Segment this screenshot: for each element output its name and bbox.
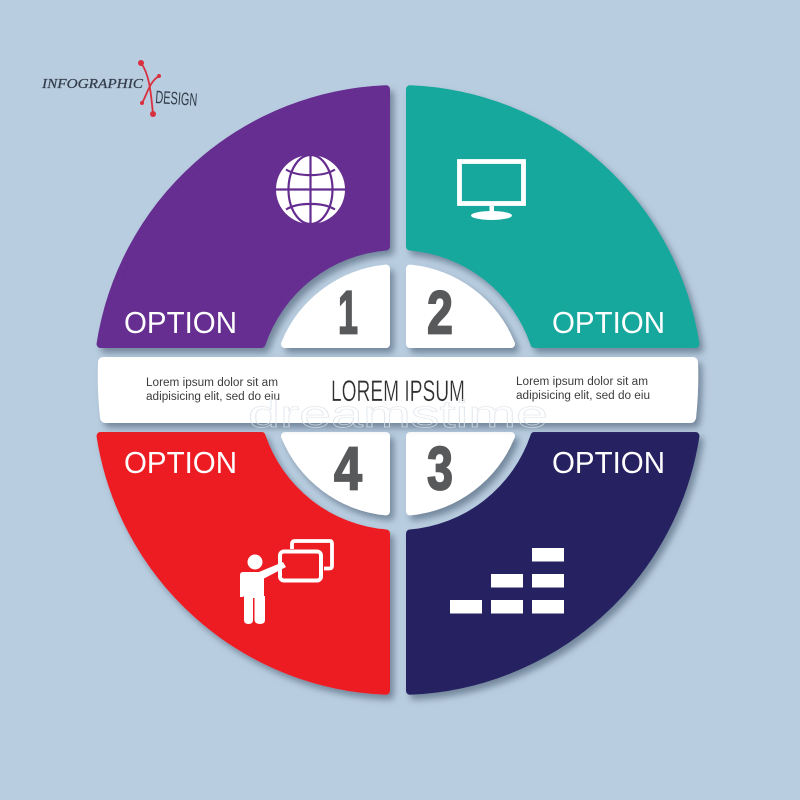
icon: monitor: [460, 162, 524, 220]
panel: number 3 segment: 3: [427, 434, 453, 502]
panel: number 4 segment: [285, 434, 386, 511]
text block: left description: Lorem ipsum dolor sit am: [146, 377, 278, 389]
logo: Infographic Design: INFOGRAPHIC: [41, 77, 144, 92]
heading: Lorem Ipsum: LOREM IPSUM: [331, 375, 465, 408]
icon: stepped bars: [450, 548, 564, 614]
panel: number 4 segment: 4: [334, 434, 362, 502]
panel 1: purple quadrant: [101, 89, 386, 344]
panel 3: navy quadrant: [410, 436, 695, 691]
panel: number 1 segment: [285, 269, 386, 346]
panel 3: navy quadrant: OPTION: [552, 446, 665, 480]
logo: Infographic Design: DESIGN: [155, 87, 198, 110]
panel: number 2 segment: [410, 269, 511, 346]
icon: globe: [276, 155, 345, 224]
logo: Infographic Design: [41, 60, 198, 117]
text block: left description: [146, 377, 280, 403]
panel 2: teal quadrant: OPTION: [552, 306, 665, 340]
panel 1: purple quadrant: OPTION: [124, 306, 237, 340]
panel 4: red quadrant: [101, 436, 386, 691]
icon: presenter with boards: [240, 541, 332, 624]
panel: number 1 segment: 1: [338, 278, 358, 346]
panel 2: teal quadrant: [410, 89, 695, 344]
panel: central white band: [98, 357, 698, 423]
text block: right description: Lorem ipsum dolor sit am: [516, 376, 648, 388]
panel 4: red quadrant: OPTION: [124, 446, 237, 480]
text block: right description: [516, 376, 650, 402]
watermark: dreamstime: [248, 394, 548, 436]
panel: number 2 segment: 2: [427, 278, 453, 346]
text block: right description: adipisicing elit, sed do eiu: [516, 390, 650, 402]
text block: left description: adipisicing elit, sed do eiu: [146, 391, 280, 403]
panel: number 3 segment: [410, 434, 511, 511]
